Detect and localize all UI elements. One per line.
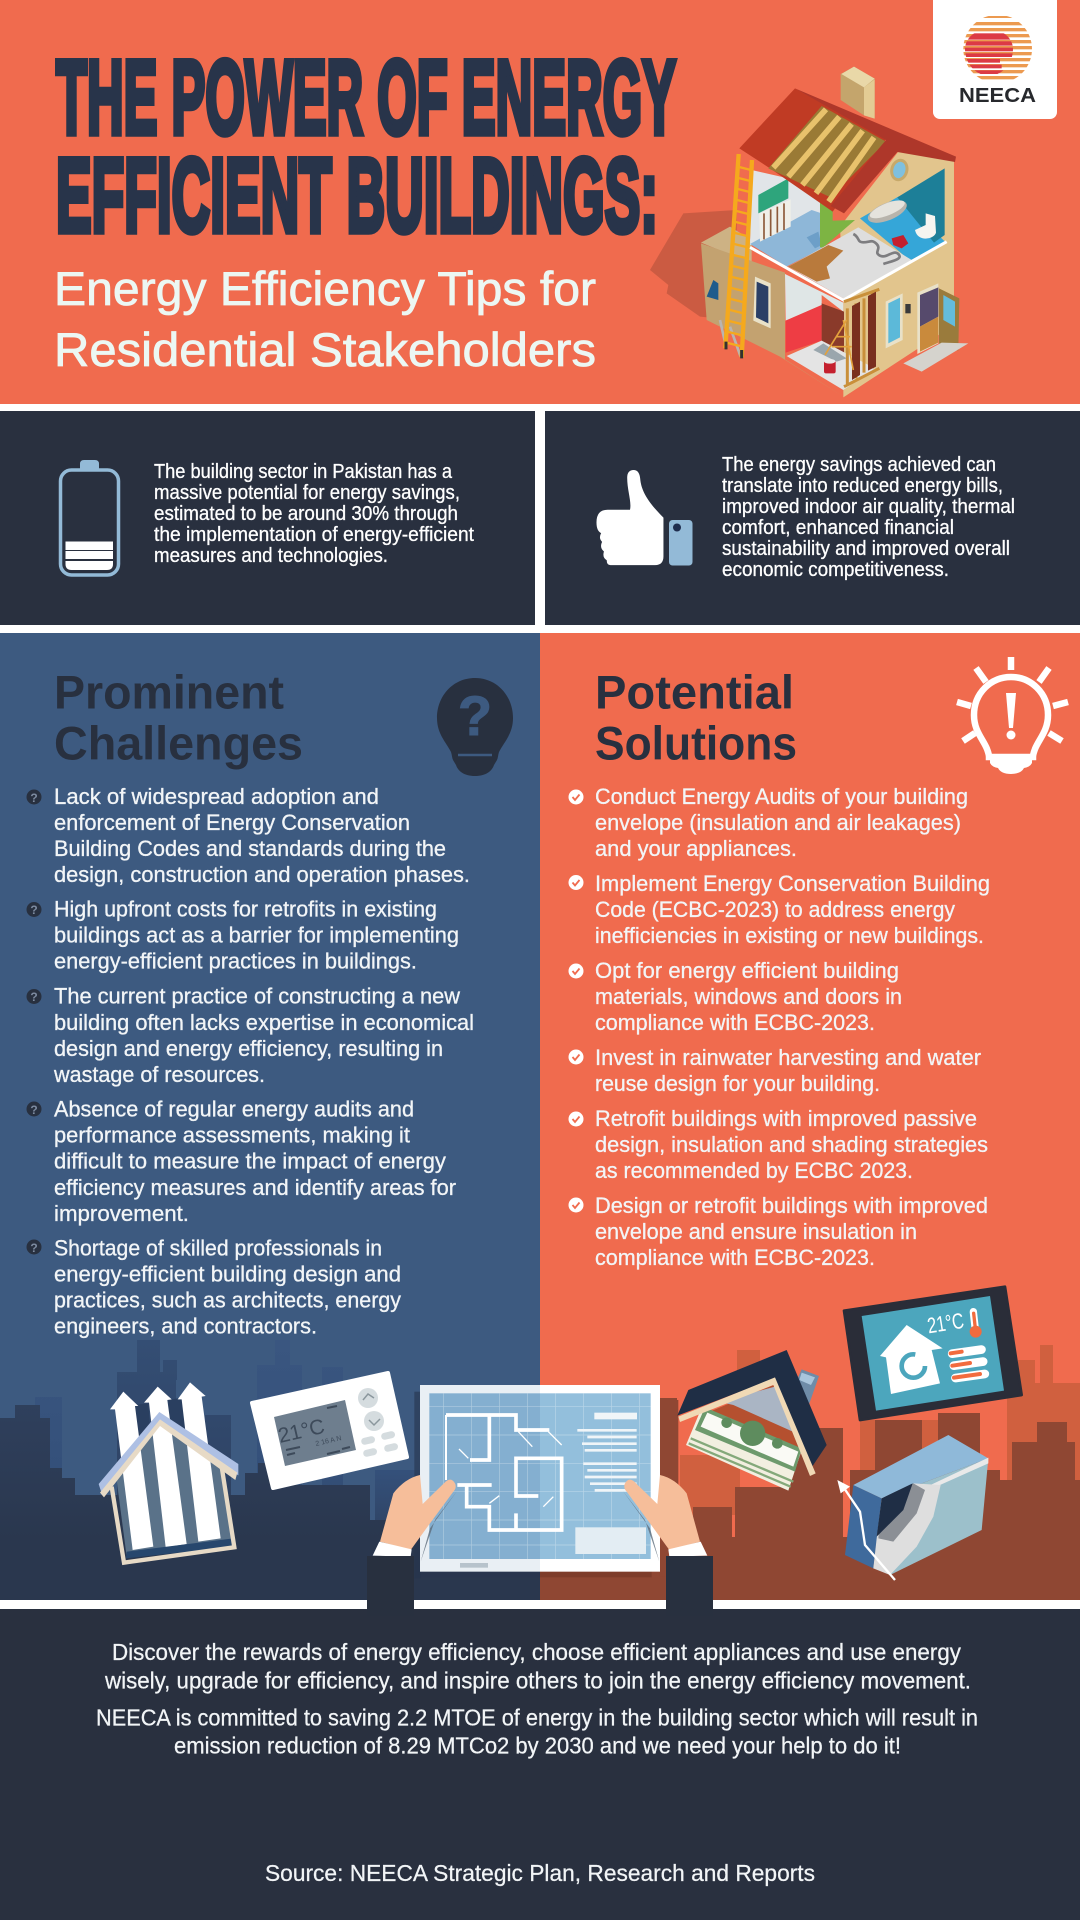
- heading: prominent challenges: [54, 666, 303, 770]
- icon: smart thermostat tablet: [844, 1287, 1022, 1420]
- icon: house with money: [677, 1350, 827, 1491]
- text: challenge lines: Lack of widespread adoption and: [54, 784, 379, 809]
- icon: wall thermostat: 21°C: [276, 1415, 327, 1448]
- skyline: right: [540, 1345, 1080, 1600]
- icon: hands holding blueprint: [373, 1385, 707, 1578]
- icon: question bulb: ?: [458, 684, 492, 747]
- bullet: solution 4: [568, 1050, 584, 1064]
- footer text: emission reduction of 8.29 MTCo2 by 2030 and we need your help to do it!: [174, 1732, 901, 1758]
- icon: house with rising arrows: [99, 1382, 238, 1563]
- text: challenge lines: enforcement of Energy Conservation: [54, 810, 410, 835]
- subtitle: [54, 262, 596, 376]
- header panel: [0, 0, 1080, 404]
- text: solution lines: reuse design for your building.: [595, 1071, 880, 1096]
- text: solution lines: compliance with ECBC-2023.: [595, 1245, 875, 1270]
- text: solution lines: envelope (insulation and air leakages): [595, 810, 961, 835]
- title: [56, 40, 676, 254]
- bullet: challenge 4: [26, 1102, 42, 1117]
- bullet: challenge 1: [26, 790, 42, 805]
- footer text: NEECA is committed to saving 2.2 MTOE of energy in the building sector which will result in: [96, 1704, 978, 1730]
- bullet list: challenges: [26, 784, 474, 1338]
- footer text: [96, 1639, 978, 1758]
- text: challenge lines: energy-efficient building design and: [54, 1262, 401, 1286]
- text: benefits: economic competitiveness.: [722, 559, 949, 581]
- text: solution lines: materials, windows and doors in: [595, 984, 902, 1009]
- text: challenge lines: wastage of resources.: [53, 1062, 265, 1087]
- source: Source: NEECA Strategic Plan, Research and Reports: [265, 1860, 815, 1886]
- text: solution lines: design, insulation and shading strategies: [595, 1132, 988, 1157]
- icon: question bulb: [437, 678, 513, 776]
- subtitle: Energy Efficiency Tips for: [54, 262, 596, 315]
- sleeves: [367, 1556, 713, 1616]
- text: challenge lines: The current practice of constructing a new: [54, 984, 460, 1008]
- text: challenge lines: practices, such as architects, energy: [54, 1288, 401, 1312]
- text: challenge lines: Shortage of skilled professionals in: [54, 1236, 382, 1260]
- text: challenge lines: High upfront costs for retrofits in existing: [54, 896, 437, 922]
- icon: idea bulb: [957, 657, 1068, 774]
- heading: potential solutions: Solutions: [595, 716, 797, 770]
- text: solution lines: Opt for energy efficient building: [595, 958, 899, 983]
- panel: savings potential: [0, 411, 535, 625]
- text: solution lines: envelope and ensure insulation in: [595, 1219, 917, 1244]
- text: savings potential: measures and technologies.: [154, 545, 388, 567]
- text: challenge lines: buildings act as a barrier for implementing: [54, 922, 459, 948]
- bullet: challenge 2: [26, 902, 42, 917]
- icon: wall insulation block: [837, 1435, 988, 1580]
- text: solution lines: as recommended by ECBC 2023.: [595, 1158, 913, 1183]
- icon: battery: [60, 460, 118, 575]
- text: benefits: sustainability and improved overall: [722, 538, 1010, 560]
- text: savings potential: estimated to be around 30% through: [154, 503, 458, 525]
- text: solution lines: compliance with ECBC-2023.: [595, 1010, 875, 1035]
- text: benefits: translate into reduced energy bills,: [722, 475, 1003, 497]
- bullet: challenge 3: [26, 989, 42, 1004]
- panel: benefits: [545, 411, 1080, 625]
- text: challenge lines: Absence of regular energy audits and: [54, 1096, 414, 1122]
- heading: prominent challenges: Prominent: [54, 666, 284, 718]
- bullet: solution 6: [568, 1198, 584, 1212]
- text: solution lines: Retrofit buildings with improved passive: [595, 1106, 977, 1131]
- bullet: challenge 3: ?: [30, 990, 38, 1004]
- bullet: challenge 1: ?: [30, 791, 38, 805]
- text: challenge lines: energy-efficient practices in buildings.: [54, 948, 417, 974]
- footer text: Discover the rewards of energy efficiency, choose efficient appliances and use energy: [112, 1639, 961, 1665]
- text: savings potential: The building sector in Pakistan has a: [154, 461, 453, 483]
- bullet: challenge 4: ?: [30, 1103, 38, 1117]
- text: solution lines: Conduct Energy Audits of your building: [595, 784, 968, 809]
- text: benefits: [722, 454, 1015, 581]
- logo: NEECA: [933, 0, 1057, 119]
- bullet: challenge 5: [26, 1240, 42, 1255]
- bullet: solution 2: [568, 875, 584, 890]
- bullet: solution 1: [568, 790, 584, 804]
- text: challenge lines: Building Codes and standards during the: [54, 836, 446, 861]
- text: benefits: The energy savings achieved can: [722, 454, 996, 476]
- text: challenge lines: efficiency measures and identify areas for: [54, 1175, 456, 1200]
- text: challenge lines: building often lacks expertise in economical: [54, 1010, 474, 1035]
- icon: wall thermostat: [252, 1373, 407, 1488]
- text: solution lines: Invest in rainwater harvesting and water: [595, 1045, 981, 1070]
- bullet: challenge 5: ?: [30, 1241, 38, 1255]
- panel: potential solutions: [540, 633, 1080, 1600]
- text: savings potential: massive potential for energy savings,: [154, 482, 460, 504]
- text: savings potential: [154, 461, 474, 567]
- text: challenge lines: [53, 784, 474, 1338]
- text: solution lines: Code (ECBC-2023) to address energy: [595, 897, 955, 922]
- bullet: solution 5: [568, 1112, 584, 1126]
- text: challenge lines: performance assessments, making it: [54, 1122, 410, 1148]
- text: solution lines: Design or retrofit buildings with improved: [595, 1193, 988, 1218]
- text: solution lines: [595, 784, 990, 1270]
- bullet: challenge 2: ?: [30, 903, 38, 917]
- heading: prominent challenges: Challenges: [54, 716, 303, 770]
- bullet list: solutions: [568, 784, 990, 1270]
- text: solution lines: Implement Energy Conservation Building: [595, 871, 990, 896]
- text: challenge lines: improvement.: [54, 1201, 189, 1226]
- illustration: cutaway house: [650, 67, 968, 397]
- logo: NEECA: NEECA: [959, 85, 1036, 107]
- text: savings potential: the implementation of energy-efficient: [154, 524, 474, 546]
- text: benefits: comfort, enhanced financial: [722, 517, 954, 539]
- text: solution lines: inefficiencies in existing or new buildings.: [595, 923, 984, 948]
- text: challenge lines: design, construction and operation phases.: [54, 862, 470, 887]
- panel: prominent challenges: [0, 633, 540, 1600]
- subtitle: Residential Stakeholders: [54, 323, 596, 376]
- text: challenge lines: difficult to measure the impact of energy: [54, 1148, 446, 1174]
- heading: potential solutions: [595, 666, 797, 770]
- footer panel: [0, 1609, 1080, 1920]
- text: benefits: improved indoor air quality, thermal: [722, 496, 1015, 518]
- text: challenge lines: engineers, and contractors.: [54, 1314, 317, 1338]
- bullet: solution 3: [568, 964, 584, 978]
- icon: wall thermostat: 2 16 A N: [315, 1435, 342, 1448]
- text: challenge lines: design and energy efficiency, resulting in: [54, 1036, 443, 1061]
- skyline: left: [0, 1340, 540, 1600]
- text: solution lines: and your appliances.: [595, 836, 797, 861]
- footer text: wisely, upgrade for efficiency, and inspire others to join the energy efficiency movement.: [104, 1668, 971, 1694]
- icon: smart thermostat tablet: 21°C: [926, 1308, 966, 1338]
- heading: potential solutions: Potential: [595, 666, 794, 718]
- icon: thumbs up: [596, 470, 692, 566]
